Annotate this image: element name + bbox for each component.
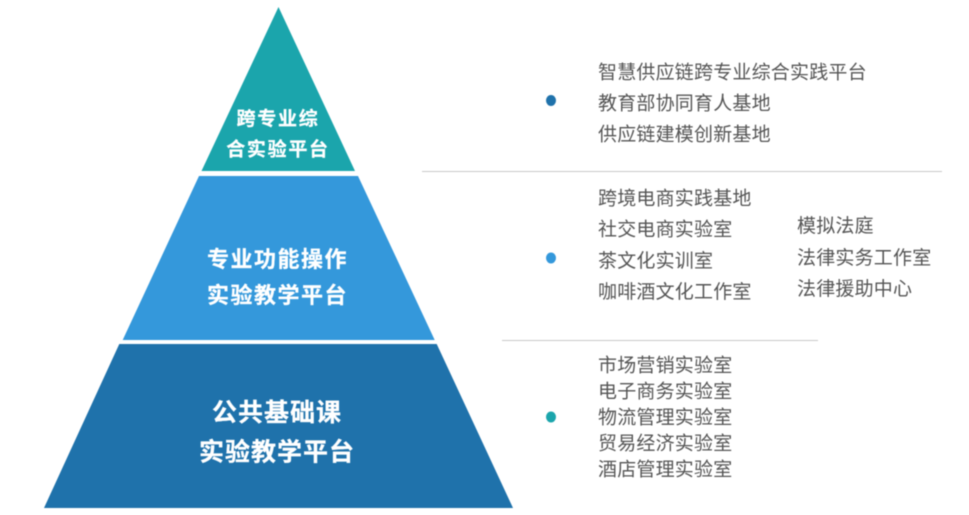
tier label: bottom: 公共基础课 bbox=[212, 399, 342, 427]
list: top group: 智慧供应链跨专业综合实践平台 bbox=[598, 62, 867, 84]
list: middle group column one: 咖啡酒文化工作室 bbox=[598, 281, 752, 303]
tier label: middle: 专业功能操作 bbox=[207, 247, 348, 272]
list: bottom group: 物流管理实验室 bbox=[598, 406, 732, 428]
tier label: top: 跨专业综 bbox=[237, 107, 319, 130]
tier: top teal bbox=[202, 7, 355, 171]
list: middle group column two: 模拟法庭 bbox=[797, 215, 874, 237]
tier: bottom dark blue bbox=[44, 344, 513, 508]
bullet: top group bbox=[546, 95, 556, 106]
list: middle group column one: 社交电商实验室 bbox=[598, 218, 732, 240]
list: top group: 供应链建模创新基地 bbox=[598, 124, 771, 146]
list: middle group column one: 跨境电商实践基地 bbox=[598, 188, 752, 210]
tier label: top: 合实验平台 bbox=[226, 138, 330, 160]
tier label: middle: 实验教学平台 bbox=[207, 283, 348, 308]
list: bottom group: 市场营销实验室 bbox=[598, 354, 732, 376]
tier label: bottom: 实验教学平台 bbox=[199, 438, 355, 466]
list: bottom group: 酒店管理实验室 bbox=[598, 458, 732, 480]
pyramid bbox=[44, 7, 513, 508]
bullet: middle group bbox=[546, 252, 556, 264]
list: top group: 教育部协同育人基地 bbox=[598, 92, 771, 114]
tier: middle blue bbox=[123, 176, 435, 340]
bullet: bottom group bbox=[546, 412, 556, 422]
list: middle group column two: 法律援助中心 bbox=[797, 278, 912, 300]
list: bottom group: 电子商务实验室 bbox=[598, 380, 732, 402]
list: middle group column one: 茶文化实训室 bbox=[598, 250, 713, 272]
list: middle group column two: 法律实务工作室 bbox=[797, 247, 931, 269]
list: bottom group: 贸易经济实验室 bbox=[598, 432, 732, 454]
